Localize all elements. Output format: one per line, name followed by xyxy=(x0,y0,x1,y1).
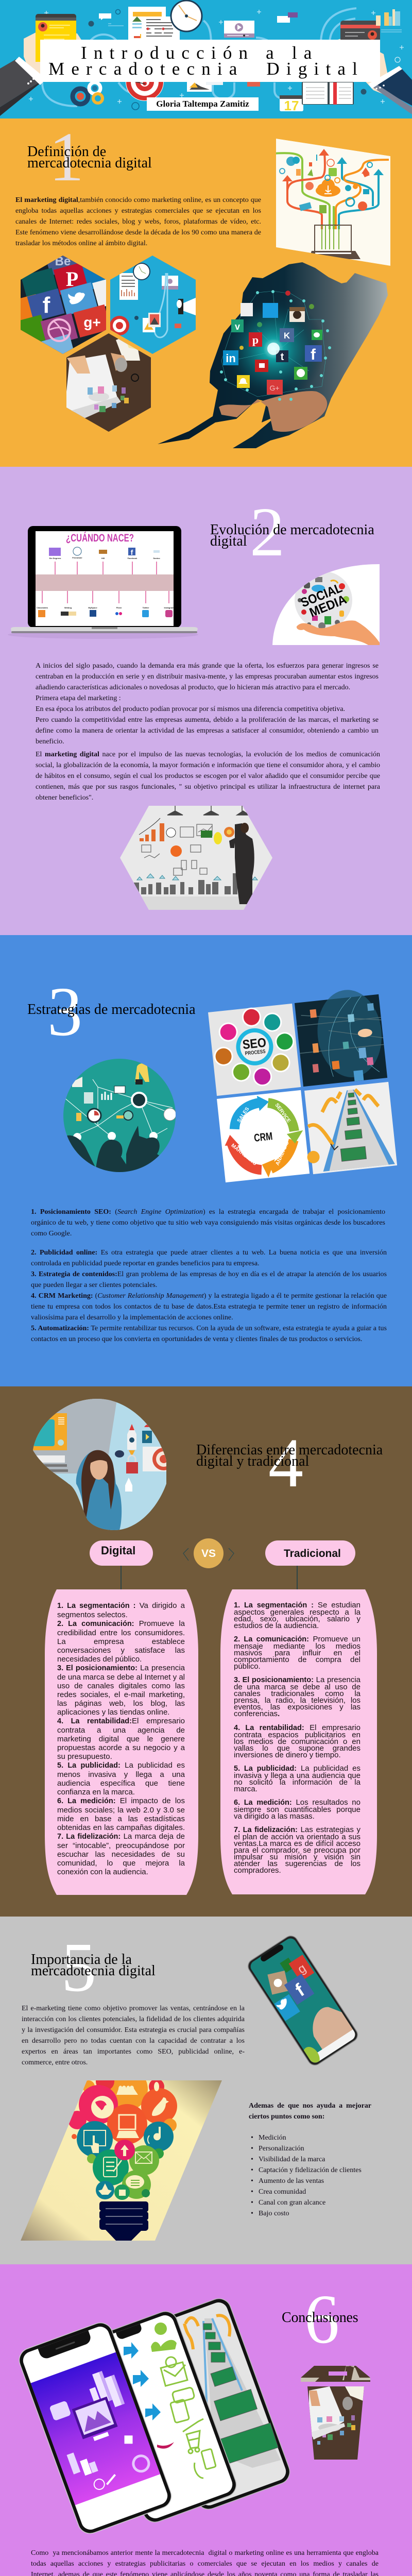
monitor and laptop xyxy=(309,225,360,259)
text block: traditional list: 2. La comunicación: Promueve un xyxy=(234,1634,360,1643)
text block: traditional list: 5. La publicidad: La publicidad es xyxy=(234,1764,360,1772)
image: CRM cycle: SALES xyxy=(236,1106,251,1124)
image: social tiles hexagon: g+ xyxy=(83,314,101,330)
digital pill xyxy=(90,1540,153,1566)
text block: digital list: de una marca se debe al Internet y al xyxy=(57,1672,185,1682)
photo cards xyxy=(187,80,260,92)
text block: traditional list: 1. La segmentación : Se estudian xyxy=(234,1600,360,1609)
text block: definition: El marketing digital,también conocido como marketing online, es un concepto que xyxy=(15,196,261,204)
image: three phones xyxy=(16,2295,293,2537)
heading: Conclusiones xyxy=(282,2309,358,2326)
text block: digital list: 6. La medición: El impacto de los xyxy=(57,1796,185,1805)
text block: digital list: segmentos selectos. xyxy=(57,1611,128,1619)
image: phone with social icons: f xyxy=(291,1979,308,2001)
text block: importance: commerce, entre otros. xyxy=(22,2059,88,2066)
text block: digital list: medios sociales; la web 2.0 y 3.0 se xyxy=(57,1805,185,1815)
text block: birth of digital marketing xyxy=(36,751,380,802)
bullet list: benefits: • xyxy=(251,2177,253,2185)
text block: conclusions: todas aquellas acciones y estrategias publicitarias o comerciales que se ejecutan en los medios y canales de xyxy=(31,2560,379,2568)
text block: birth of digital marketing: de hábitos en el consumo, según el cual los productos se escogen por el valor añadido que el consumidor percibe que xyxy=(36,772,380,780)
image: network tree xyxy=(273,139,390,266)
image: social media globe in hand: SOCIAL xyxy=(299,581,344,610)
image: head silhouette with social network icons: in xyxy=(226,352,236,365)
text block: traditional list: conferencias. xyxy=(234,1709,280,1718)
text block: traditional list: vallas lo que supone grandes xyxy=(234,1743,360,1753)
bullet list: benefits: • xyxy=(251,2210,253,2217)
heading: Evolución de mercadotecnia xyxy=(210,521,374,538)
bar chart xyxy=(376,9,400,26)
text block: importance: interacción con los clientes potenciales, la fidelidad de los clientes adquirida xyxy=(22,2015,245,2023)
text block: traditional list: comportamiento de compra del xyxy=(234,1655,360,1664)
text block: traditional list: 6. La medición: Los resultados no xyxy=(234,1798,360,1806)
text block: digital list: obtenidas en las campañas digitales. xyxy=(57,1823,185,1832)
image: SEO process: SEO xyxy=(242,1036,267,1052)
text block: benefits intro: Ademas de que nos ayuda a mejorar xyxy=(249,2102,371,2110)
text block: importance xyxy=(22,2005,245,2066)
phone right: assembly line xyxy=(134,2295,293,2513)
heading: Diferencias entre mercadotecnia xyxy=(196,1442,383,1458)
phone middle: contact icons xyxy=(81,2308,239,2526)
text block: traditional list: 7. La fidelización: Las estrategias y xyxy=(234,1825,360,1834)
text block: digital list: 3. El posicionamiento: La presencia xyxy=(57,1663,185,1672)
heading: Definición de xyxy=(27,143,106,160)
heading xyxy=(196,1442,383,1469)
panel: 6 conclusions xyxy=(0,2264,412,2576)
image: social tiles hexagon xyxy=(21,256,106,354)
right hand with dark phone xyxy=(332,21,412,114)
calendar: 17 xyxy=(284,98,299,113)
bullet list: benefits: Captación y fidelización de clientes xyxy=(259,2166,362,2174)
text block: digital list: redes sociales, el e-mail marketing, xyxy=(57,1690,185,1699)
text block: traditional list: prensa, la radio, la televisión, los xyxy=(234,1696,360,1704)
image: social tiles hexagon: Be xyxy=(55,255,71,268)
text block: evolution first stage xyxy=(36,662,379,745)
heading: Estrategias de mercadotecnia xyxy=(27,1002,196,1017)
image: head silhouette with social network icons: G+ xyxy=(269,384,280,392)
image: social media globe in hand: MEDIA xyxy=(307,592,349,620)
heading xyxy=(31,1952,156,1978)
heading: mercadotecnia digital xyxy=(31,1963,156,1978)
text block: traditional list: ventas.La marca es de difícil acceso xyxy=(234,1839,360,1848)
image: laptop with timeline: Hi5 xyxy=(101,557,105,560)
image: laptop with timeline: Sonico xyxy=(153,557,160,560)
connector lines xyxy=(121,1566,297,1590)
text block: digital list: aplicaciones y las tiendas online. xyxy=(57,1707,169,1717)
bullet list: benefits: Aumento de las ventas xyxy=(259,2177,324,2185)
text block: definition: engloba todas aquellas acciones y estrategias comerciales que se ejecutan en los xyxy=(15,207,261,215)
text block: digital list: marketing digital que le genere xyxy=(57,1734,185,1743)
big numeral 3: 3 xyxy=(47,973,82,1050)
text block: digital list: comunidad, lo que mejora la xyxy=(57,1859,185,1867)
text block: importance: expertos en áreas tan importantes como SEO, publicidad online, e- xyxy=(22,2048,245,2056)
text block: digital list: 2. La comunicación: Promueve la xyxy=(57,1619,185,1628)
panel: 2 evolution xyxy=(0,467,412,935)
icon: cloud xyxy=(316,179,340,197)
image: phone with social icons: g xyxy=(295,1961,308,1977)
text block: digital list: La empresa establece xyxy=(57,1637,185,1646)
image: light bulb of social icons xyxy=(21,2067,222,2242)
text block: traditional list: va dirigido a las masas. xyxy=(234,1811,315,1821)
text block: importance: El e-marketing tiene como objetivo promover las ventas, centrándose en la xyxy=(22,2005,245,2012)
calendar xyxy=(280,95,303,113)
text block: strategies 2 to 5: valiosísima para el desarrollo y la implementación de acciones online. xyxy=(31,1314,233,1321)
image: man drawing business plan xyxy=(120,806,272,910)
text block: strategies 2 to 5: contactos en un proceso que los convierta en oportunidades de venta y clientes finales de tus productos o servicios. xyxy=(31,1335,362,1343)
text block: traditional list: impulsar su misión y visión sin xyxy=(234,1853,360,1861)
text block: importance: y la investigación del consumidor. Esta estrategia es crucial para compañías xyxy=(22,2026,245,2034)
text block: digital list: las páginas web, los blog, las xyxy=(57,1699,185,1707)
text block: definition: canales de Internet: redes sociales, blog y webs, foros, plataformas de vídeo, etc. xyxy=(15,218,261,226)
bullet list: benefits: • xyxy=(251,2188,253,2196)
image: robotic assembly line xyxy=(300,1082,397,1175)
video card xyxy=(99,12,298,38)
text block: traditional list: invasiva y llega a una audiencia que xyxy=(234,1771,360,1780)
bullet list: benefits xyxy=(251,2134,362,2217)
image: social tiles hexagon: P xyxy=(66,267,78,291)
text block: digital list: conversaciones y satisface las xyxy=(57,1646,185,1655)
image: laptop with timeline: Classmates xyxy=(37,606,48,609)
text block: definition: trasladar los métodos online al ámbito digital. xyxy=(15,240,147,247)
image: CRM cycle: ANALYSIS xyxy=(274,1141,290,1166)
image: thoughtful woman with marketing icons xyxy=(33,1399,166,1530)
text block: strategies 2 to 5: controlada en publicidad puede reportar en grandes beneficios para tu empresa. xyxy=(31,1260,260,1267)
text block: strategies 2 to 5: 2. Publicidad online: Es otra estrategia que puede atraer clientes a tu web. La buena noticia es que una inversión xyxy=(31,1249,387,1257)
bullet list: benefits: Bajo costo xyxy=(259,2210,289,2217)
traditional pill xyxy=(265,1540,355,1566)
text block: traditional list: masivos para influir en el xyxy=(234,1649,360,1657)
image: head silhouette with social network icons: K xyxy=(284,331,290,341)
digital panel shape xyxy=(45,1589,198,1895)
text block: conclusions: Como ya mencionábamos anterior mente la mercadotecnia digital o marketing online es una herramienta que engloba xyxy=(31,2549,379,2557)
text block: evolution first stage: beneficio. xyxy=(36,738,64,745)
big numeral 6: 6 xyxy=(304,2281,339,2358)
image: laptop with timeline: ¿CUÁNDO NACE? xyxy=(66,532,134,544)
bullet list: benefits: Visibilidad de la marca xyxy=(259,2156,325,2163)
text block: evolution first stage: A inicios del siglo pasado, cuando la demanda era más grande que la oferta, los esfuerzos para generar ingresos se xyxy=(36,662,379,670)
image: SEO process: PROCESS xyxy=(245,1049,266,1057)
text block: evolution first stage: Pero cuando la competitividad entre las empresas aumenta, debido a la proliferación de las marcas, el marketing se xyxy=(36,716,379,724)
heading: mercadotecnia digital xyxy=(27,155,152,171)
left hand with yellow phone xyxy=(0,14,85,116)
text block: traditional list: de una marca se debe al uso de xyxy=(234,1683,360,1691)
text block: strategies 2 to 5: 3. Estrategia de contenidos:El gran problema de las empresas de hoy en día es el de atrapar la atención de los usuarios xyxy=(31,1270,387,1278)
author box xyxy=(147,97,259,111)
text block: birth of digital marketing: obtener beneficios". xyxy=(36,794,93,802)
text block: digital list: necesidades del público. xyxy=(57,1655,142,1663)
bullet list: benefits: • xyxy=(251,2156,253,2163)
text block: digital list xyxy=(57,1601,185,1876)
image: teal network of ideas circle xyxy=(62,1056,178,1177)
image: marketing illustration hexagon xyxy=(110,256,196,354)
text block: traditional list: atender las sugerencias de los xyxy=(234,1859,360,1868)
bullet list: benefits: Canal con gran alcance xyxy=(259,2199,325,2207)
big numeral 4: 4 xyxy=(268,1425,303,1502)
bullet list: benefits: • xyxy=(251,2199,253,2207)
text block: traditional list: mensaje mediante los medios xyxy=(234,1641,360,1651)
panel: 5 importance xyxy=(0,1917,412,2264)
text block: traditional list: estudios de la audiencia. xyxy=(234,1621,319,1630)
text block: traditional list: inversiones de dinero y tiempo. xyxy=(234,1751,341,1759)
text block: strategies 2 to 5: que pueden llegar a ser clientes potenciales. xyxy=(31,1281,157,1289)
image: laptop with timeline: Friendster xyxy=(72,556,82,559)
image: laptop with timeline xyxy=(8,526,198,639)
text block: traditional list: 3. El posicionamiento: La presencia xyxy=(234,1675,360,1684)
text block: digital list: 5. La publicidad: La publicidad es xyxy=(57,1761,185,1769)
gears xyxy=(73,82,102,104)
text block: digital list: conexión con la audiencia. xyxy=(57,1867,148,1876)
image: laptop with timeline: Twitter xyxy=(143,606,149,609)
text block: traditional list: aspectos generales respecto a la xyxy=(234,1607,360,1617)
text block: digital list: 4. La rentabilidad:El empresario xyxy=(57,1717,185,1725)
text block: strategies list: orgánico de tu web, y tiene como objetivo que tu sitio web vaya consiguiendo más visitas orgánicas desde los buscadores xyxy=(31,1219,385,1227)
documents and clock xyxy=(128,1,202,43)
image: head silhouette with social network icons: f xyxy=(311,346,316,363)
bullet list: benefits: • xyxy=(251,2145,253,2153)
text block: strategies 2 to 5: tiene tu empresa con todos los contactos de tu base de datos.Esta estrategia te permite tener un registro de información xyxy=(31,1303,387,1311)
text block: definition xyxy=(15,196,261,247)
image: laptop with timeline: MySpace xyxy=(88,606,97,609)
text block: traditional list: edad, sexo, ubicación, salario y xyxy=(234,1615,360,1623)
image: head silhouette with social network icons: t xyxy=(281,351,284,363)
text block: digital list: ser “intocable”, preocupándose por xyxy=(57,1841,185,1850)
big numeral 1: 1 xyxy=(49,118,84,196)
phone left: purple dashboard xyxy=(16,2319,175,2537)
panel: 3 strategies xyxy=(0,935,412,1386)
text block: traditional list: eventos, las exposiciones y las xyxy=(234,1702,360,1711)
notebook xyxy=(302,82,354,105)
text block: traditional list: los medios de comunicación o en xyxy=(234,1737,360,1745)
image: head silhouette with social network icons xyxy=(158,262,388,448)
image: laptop with timeline: Facebook xyxy=(128,557,138,560)
bullet list: benefits: Crea comunidad xyxy=(259,2188,306,2196)
text block: digital list: mide en base a las estadísticas xyxy=(57,1815,185,1823)
text block: traditional list: canales tradicionales como la xyxy=(234,1689,360,1698)
panel: 4 differences xyxy=(0,1386,412,1917)
VS badge: VS xyxy=(201,1548,216,1560)
image: laptop with timeline: Six Degrees xyxy=(49,557,61,560)
digital pill: Digital xyxy=(101,1544,135,1557)
text block: traditional list: público. xyxy=(234,1662,261,1670)
text block: strategies list xyxy=(31,1208,385,1238)
text block: digital list: audiencia específica que tiene xyxy=(57,1778,185,1788)
text block: birth of digital marketing: El marketing digital nace por el impulso de las nuevas tecnologías, la evolución de los medios de comunicación xyxy=(36,751,380,758)
text block: traditional list: el plan de acción va orientado a sus xyxy=(234,1832,360,1841)
image: head silhouette with social network icons: v xyxy=(235,321,240,332)
traditional pill: Tradicional xyxy=(284,1548,341,1560)
illustration: digital marketing desk with hands, phones, clock and icons xyxy=(0,1,412,116)
title box: Introducción a la xyxy=(81,43,319,63)
text block: traditional list: marca. xyxy=(234,1785,258,1793)
image: digital globe xyxy=(294,987,387,1087)
image: CRM cycle: CRM xyxy=(253,1130,273,1144)
image: SEO process xyxy=(208,1004,301,1096)
image: coffee cup with laptop photo xyxy=(301,2365,370,2461)
heading: digital xyxy=(210,533,247,549)
image: CRM cycle xyxy=(217,1090,310,1182)
text block: birth of digital marketing: social, la globalización de la economía, la mayor formación e información que tiene el consumidor ahora, y el cambio xyxy=(36,761,380,769)
text block: definition: Este fenómeno viene desarrollándose desde la década de los 90 como una manera de xyxy=(15,229,261,236)
text block: strategies 2 to 5: 4. CRM Marketing: (Customer Relationship Management) y la estrategia ligado a él te permite gestionar la relación que xyxy=(31,1292,387,1300)
traditional panel shape xyxy=(220,1589,377,1894)
text block: digital list: propuestas acorde a su negocio y a xyxy=(57,1743,185,1752)
VS badge xyxy=(183,1538,234,1568)
title box xyxy=(40,40,380,82)
text block: traditional list: para el comprador, se preocupa por xyxy=(234,1845,360,1855)
text block: importance: en desarrollo pero no todas cuentan con la capacidad de contratar a los xyxy=(22,2037,245,2045)
text block: benefits intro xyxy=(249,2102,371,2121)
text block: traditional list xyxy=(234,1600,360,1874)
image: laptop with timeline: Weblog xyxy=(64,606,72,609)
text block: digital list: confianza en la marca. xyxy=(57,1788,135,1796)
heading xyxy=(210,521,374,549)
heading xyxy=(27,143,152,171)
text block: evolution first stage: añadiendo características adicionales o novedosas al producto, que lo hicieran más atractivo para el mercado. xyxy=(36,684,350,691)
heading: Importancia de la xyxy=(31,1952,132,1967)
text block: strategies list: 1. Posicionamiento SEO: (Search Engine Optimization) es la estrategia encargada de trabajar el posicionamiento xyxy=(31,1208,385,1216)
text block: traditional list: 4. La rentabilidad: El empresario xyxy=(234,1723,360,1732)
image: laptop on wood desk hexagon xyxy=(64,332,151,432)
text block: evolution first stage: centraban en la producción en serie y en distribuir masiva-mente, y las empresas procuraban aumentar estos ingresos xyxy=(36,673,379,681)
text block: digital list: su presupuesto. xyxy=(57,1752,112,1761)
panel: 1 definition xyxy=(0,118,412,467)
text block: strategies list: como Google. xyxy=(31,1230,72,1238)
image: phone with social icons xyxy=(244,1933,360,2069)
image: CRM cycle: MARKETING xyxy=(230,1143,258,1167)
text block: evolution first stage: Primera etapa del marketing : xyxy=(36,694,121,702)
text block: benefits intro: ciertos puntos como son: xyxy=(249,2113,324,2121)
text block: traditional list: compradores. xyxy=(234,1866,281,1874)
big numeral 2: 2 xyxy=(250,494,285,571)
target xyxy=(126,63,164,101)
text block: strategies 2 to 5 xyxy=(31,1249,387,1343)
text block: digital list: 1. La segmentación : Va dirigido a xyxy=(57,1601,185,1609)
text block: digital list: uso de canales digitales como las xyxy=(57,1682,185,1690)
text block: traditional list: contrata espacios publicitarios en xyxy=(234,1730,360,1739)
text block: digital list: 7. La fidelización: La marca deja de xyxy=(57,1832,185,1840)
image: social tiles hexagon: f xyxy=(43,293,50,318)
big numeral 5: 5 xyxy=(61,1929,96,2006)
text block: traditional list: no solicitó la información de la xyxy=(234,1777,360,1787)
image: head silhouette with social network icons: p xyxy=(252,333,259,346)
image: laptop with timeline: f xyxy=(131,548,133,556)
image: social media globe in hand xyxy=(272,564,381,645)
bullet list: benefits: • xyxy=(251,2166,253,2174)
text block: traditional list: siempre son cuantificables porque xyxy=(234,1805,360,1814)
panel: header banner xyxy=(0,0,412,118)
bullet list: benefits: Personalización xyxy=(259,2145,304,2153)
text block: birth of digital marketing: contienen, más que por sus rasgos funcionales, " su objetivo principal es utilizar la infraestructura de internet para xyxy=(36,783,380,791)
bullet list: benefits: • xyxy=(251,2134,253,2142)
image: laptop with timeline: Instagram xyxy=(164,606,174,609)
text block: strategies 2 to 5: 5. Automatización: Te permite rentabilizar tus recursos. Con la ayuda de un software, esta estrategia te ayuda a guiar a tus xyxy=(31,1325,387,1332)
text block: evolution first stage: define como la manera de orientar la actividad de las empresas a satisfacer al consumidor, obteniendo a cambio un xyxy=(36,727,379,735)
bullet list: benefits: Medición xyxy=(259,2134,286,2142)
text block: digital list: escuchar las necesidades de su xyxy=(57,1850,185,1859)
image: CRM cycle: SERVICE xyxy=(273,1103,291,1124)
author box: Gloria Taltempa Zamitiz xyxy=(156,99,249,109)
text block: digital list: credibilidad entre los consumidores. xyxy=(57,1628,185,1637)
text block: digital list: menos invasiva y llega a una xyxy=(57,1770,185,1778)
text block: conclusions xyxy=(31,2549,379,2576)
title box: Mercadotecnia Digital xyxy=(48,59,364,78)
text block: digital list: contrata a una agencia de xyxy=(57,1726,185,1734)
text block: evolution first stage: En esa época los atributos del producto podían provocar por sí mismos una diferencia competitiva objetiva. xyxy=(36,705,345,713)
heading: digital y tradicional xyxy=(196,1453,309,1469)
image: laptop with timeline: Flickr xyxy=(116,606,122,609)
